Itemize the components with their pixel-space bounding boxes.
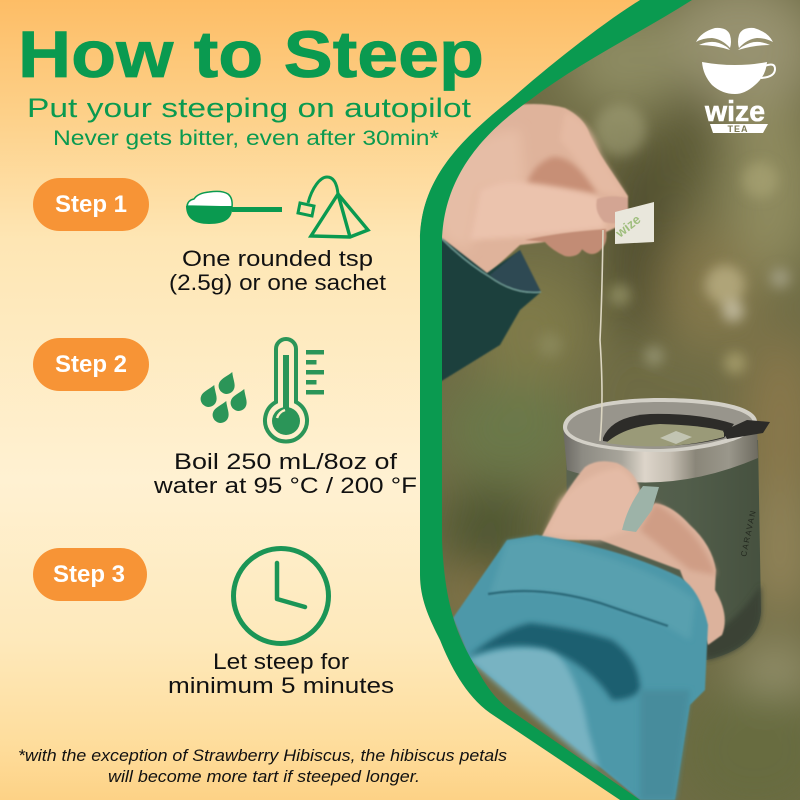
logo wordmark: wize [704,96,765,128]
logo cup [702,62,767,94]
icon: water drops [198,369,252,425]
icon: tea sachet [298,177,368,237]
step 2 text: Boil 250 mL/8oz of [174,449,398,474]
step 3 label [33,548,147,601]
photo: dark green jacket cuff [420,225,541,385]
mug lid tab [723,420,770,439]
step 3 text: minimum 5 minutes [168,673,394,698]
photo background: blurred forest [400,0,800,800]
step 2 label [33,338,149,391]
thumbnail [596,196,628,223]
logo: wize tea: TEA [728,124,748,134]
icon: clock [234,548,328,644]
icon: scoop of tea [186,191,282,224]
step 3 text [168,649,394,698]
step 2 text [153,449,417,498]
footnote: will become more tart if steeped longer. [108,768,420,786]
logo leaves [696,28,773,50]
photo: white tea bag tag: wize [612,212,643,241]
photo: white tea bag tag [612,202,654,244]
photo: hand steeping tea bag in a mug [400,0,800,800]
logo: wize tea [696,28,775,134]
step 2 label: Step 2 [55,351,127,378]
logo TEA banner [710,124,768,133]
step 2 text: water at 95 °C / 200 °F [153,473,417,498]
cream gradient panel [0,0,640,800]
photo: teal sleeve and arm [453,535,708,800]
photo: mug [563,398,770,660]
step 3 label: Step 3 [53,561,125,588]
icon: thermometer [265,339,324,441]
step 1 text: (2.5g) or one sachet [169,270,386,295]
step 1 text [169,246,386,295]
green curved band [420,0,692,800]
subtitle: Put your steeping on autopilot [27,93,472,123]
photo: mug handle [622,486,659,532]
step 1 label: Step 1 [55,191,127,218]
photo: tea bag string [600,230,603,441]
footnote [18,747,507,786]
step 1 label [33,178,149,231]
mug engraved lettering: CARAVAN [739,509,758,557]
photo: lower hand holding mug [540,461,725,645]
step 3 text: Let steep for [213,649,349,674]
tagline: Never gets bitter, even after 30min* [53,127,439,150]
footnote: *with the exception of Strawberry Hibiscus, the hibiscus petals [18,747,507,765]
step 1 text: One rounded tsp [182,246,373,271]
photo: upper hand holding tea tag [420,104,628,300]
title: How to Steep [18,17,484,91]
